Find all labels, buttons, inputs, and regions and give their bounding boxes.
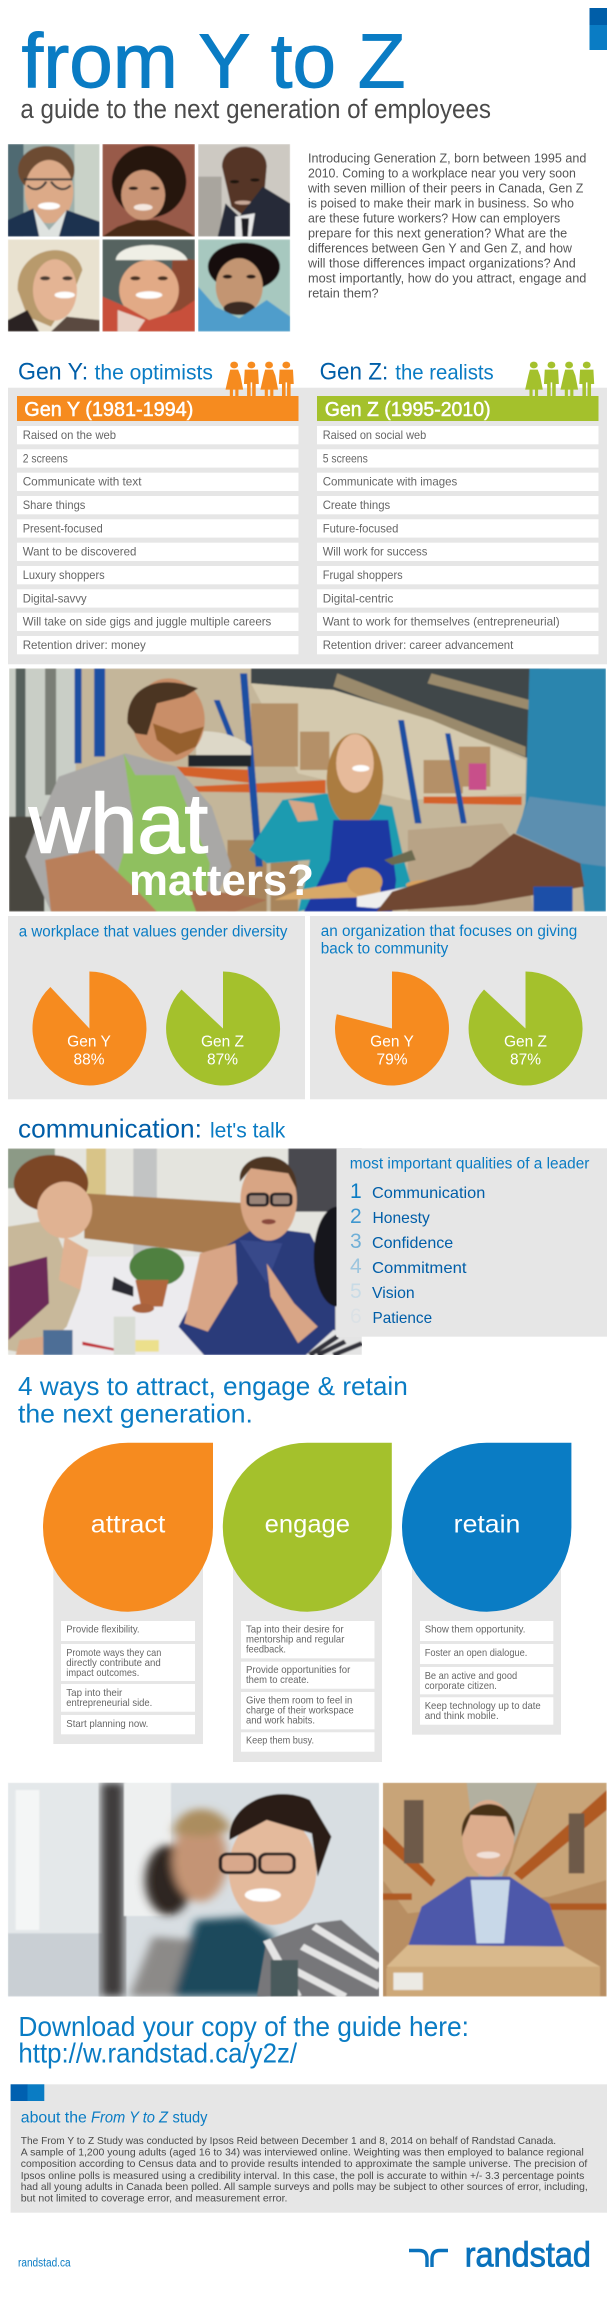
heading: Gen Z the realists: the realists: [395, 361, 494, 384]
icon: logo mark: [409, 2250, 448, 2267]
portrait 4: [8, 239, 100, 332]
item 5: 5: [350, 1280, 362, 1303]
pie: Gen Z 87%: Gen Z: [201, 1034, 244, 1051]
panel: qualities of a leader: [336, 1148, 607, 1337]
icon: blue squares: [11, 2084, 44, 2101]
heading: Gen Y the optimists: Gen Y:: [18, 358, 88, 385]
pie: Gen Y 88%: 88%: [73, 1052, 105, 1069]
item 5: Vision: [372, 1285, 415, 1302]
portrait 6: [198, 239, 290, 332]
Gen Z header bar: Gen Z (1995-2010): [325, 399, 491, 421]
study methodology text: [21, 2136, 588, 2205]
woman right: [313, 1206, 336, 1308]
column: attract: [43, 1443, 213, 1744]
column: engage: mentorship and regular: [246, 1634, 345, 1646]
drop: engage: engage: [265, 1511, 350, 1539]
study methodology text: but not limited to coverage error, and measurement error.: [21, 2194, 288, 2205]
item 6: Patience: [372, 1310, 432, 1327]
study methodology text: composition according to Census data and to provide results intended to approximate the sample universe. The precision of: [21, 2159, 587, 2170]
column: retain: [402, 1443, 571, 1735]
heading: Gen Z the realists: Gen Z:: [320, 358, 388, 385]
study methodology text: A sample of 1,200 young adults (aged 16 to 34) was interviewed online. Weighting was then employed to balance regional: [21, 2148, 584, 2159]
item 3: 3: [350, 1230, 362, 1253]
column: retain: Be an active and good: [425, 1670, 517, 1682]
portrait 3: [198, 144, 290, 237]
drop: attract: [43, 1443, 213, 1612]
drop: attract: attract: [91, 1511, 165, 1539]
woman left: [8, 1220, 80, 1355]
column: engage: Tap into their desire for: [246, 1624, 344, 1636]
Gen Y column: Luxury shoppers: [23, 568, 105, 582]
title: from Y to Z: [22, 19, 406, 105]
intro text: with seven million of their peers in Canada, Gen Z: [307, 180, 583, 195]
Gen Y column: Retention driver: money: [23, 638, 146, 652]
intro text: will those differences impact organizations? And: [307, 255, 576, 270]
heading: 4 ways: 4 ways to attract, engage & retain: [18, 1371, 408, 1401]
item 4: 4: [350, 1255, 362, 1278]
pie: Gen Z 87%: 87%: [510, 1052, 541, 1069]
column: engage: charge of their workspace: [246, 1705, 354, 1717]
Gen Y column: Digital-savvy: [23, 591, 87, 605]
column: retain: and think mobile.: [425, 1710, 499, 1722]
pie: Gen Z 87%: 87%: [207, 1052, 238, 1069]
panel title: back to community: [321, 940, 449, 957]
Gen Z header bar: [317, 396, 598, 421]
column: attract: Promote ways they can: [66, 1647, 161, 1659]
pie: Gen Y 79%: [335, 972, 449, 1086]
column: retain: corporate citizen.: [425, 1680, 497, 1692]
intro text: are these future workers? How can employers: [308, 210, 561, 225]
pie: Gen Y 79%: 79%: [376, 1052, 408, 1069]
download call to action: http://w.randstad.ca/y2z/: [18, 2038, 297, 2069]
study methodology text: had all young adults in Canada been polled. All sample surveys and polls may be subject to other sources of error, including,: [21, 2182, 588, 2193]
column: attract: Start planning now.: [66, 1718, 148, 1730]
item 4: Commitment: [372, 1260, 467, 1277]
heading: 4 ways: the next generation.: [18, 1399, 253, 1429]
Gen Y header bar: Gen Y (1981-1994): [24, 399, 193, 421]
heading: communication: let's talk: [210, 1119, 286, 1142]
item 6: 6: [350, 1305, 362, 1328]
website link: randstad.ca: [18, 2258, 71, 2270]
download call to action: [18, 2011, 469, 2069]
icon: green people: [525, 362, 594, 396]
Gen Z column: Raised on social web: [323, 428, 426, 442]
heading: Gen Y the optimists: the optimists: [94, 361, 213, 384]
Gen Y column: Will take on side gigs and juggle multiple careers: [23, 615, 271, 629]
panel: about the study: [11, 2084, 607, 2213]
column: engage: [223, 1443, 392, 1762]
pie: Gen Y 79%: Gen Y: [370, 1034, 414, 1051]
panel: giving back to community: [310, 916, 607, 1099]
intro text: [307, 150, 586, 300]
panel title: [321, 923, 577, 957]
intro text: 2010. Coming to a workplace near you very soon: [308, 165, 576, 180]
portrait 5: [102, 239, 195, 332]
heading: Gen Y the optimists: [18, 358, 213, 385]
column: engage: them to create.: [246, 1674, 309, 1686]
Gen Y column: Raised on the web: [23, 428, 116, 442]
drop: retain: [402, 1443, 571, 1612]
column: engage: Provide opportunities for: [246, 1664, 351, 1676]
man center: [178, 1227, 335, 1355]
portrait 1: [8, 144, 100, 237]
pie: Gen Y 88%: Gen Y: [67, 1034, 111, 1051]
Gen Z column: Will work for success: [323, 545, 427, 559]
about heading: [21, 2109, 207, 2126]
study methodology text: Ipsos online polls is measured using a credibility interval. In this case, the poll is accurate to within +/- 3.3 percentage points: [21, 2171, 584, 2182]
column: attract: directly contribute and: [66, 1657, 161, 1669]
item 3: Confidence: [372, 1235, 453, 1252]
intro text: prepare for this next generation? What are the: [308, 225, 567, 240]
Gen Y column: Share things: [23, 498, 85, 512]
heading: communication: [18, 1113, 286, 1143]
subtitle: a guide to the next generation of employees: [20, 94, 491, 124]
matters heading: matters?: [129, 856, 314, 905]
about heading: about the: [21, 2109, 87, 2126]
intro text: most importantly, how do you attract, engage and: [308, 270, 586, 285]
photo: smiling young woman with glasses: [8, 1783, 379, 1997]
Gen Y column: Communicate with text: [23, 475, 142, 489]
Gen Y column: [17, 396, 298, 654]
photo: warehouse worker with box: [383, 1783, 607, 1997]
column: engage: Keep them busy.: [246, 1735, 314, 1747]
Gen Z column: Retention driver: career advancement: [323, 638, 514, 652]
Gen Y column: Want to be discovered: [23, 545, 136, 559]
study methodology text: The From Y to Z Study was conducted by Ipsos Reid between December 1 and 8, 2014 on behalf of Randstad Canada.: [21, 2136, 556, 2147]
item 1: 1: [350, 1180, 362, 1203]
column: attract: impact outcomes.: [66, 1667, 139, 1679]
column: engage: feedback.: [246, 1644, 286, 1656]
panel title: an organization that focuses on giving: [321, 923, 577, 940]
what heading: what: [28, 777, 208, 871]
item 2: [350, 1205, 430, 1228]
pie: Gen Z 87%: [166, 971, 280, 1085]
intro text: is poised to make their mark in business. So who: [308, 195, 574, 210]
randstad logo: [409, 2236, 591, 2275]
drop: engage: [223, 1443, 392, 1612]
Gen Z column: [317, 396, 598, 654]
Gen Y column: Present-focused: [23, 521, 103, 535]
woman with blue apron: [249, 793, 412, 912]
intro text: retain them?: [308, 285, 379, 300]
item 3: [350, 1230, 453, 1253]
item 2: 2: [350, 1205, 362, 1228]
column: attract: entrepreneurial side.: [66, 1697, 152, 1709]
item 5: [350, 1280, 415, 1303]
Gen Y header bar: [17, 396, 298, 421]
intro text: Introducing Generation Z, born between 1995 and: [308, 150, 586, 165]
Gen Z column: Want to work for themselves (entrepreneurial): [323, 615, 560, 629]
Gen Z column: Create things: [323, 498, 390, 512]
pie: Gen Z 87%: Gen Z: [504, 1034, 547, 1051]
icon: corner brand squares: [590, 8, 607, 50]
download call to action: Download your copy of the guide here:: [18, 2011, 469, 2042]
icon: orange people: [226, 362, 294, 396]
Gen Z column: Future-focused: [323, 521, 398, 535]
column: retain: Show them opportunity.: [425, 1624, 526, 1636]
drop: retain: retain: [454, 1511, 520, 1539]
heading: communication: communication:: [18, 1113, 202, 1143]
column: attract: Provide flexibility.: [66, 1624, 140, 1636]
panel title: most important qualities of a leader: [350, 1156, 589, 1173]
pie: Gen Y 88%: [32, 971, 146, 1086]
column: engage: and work habits.: [246, 1715, 315, 1727]
intro text: differences between Gen Y and Gen Z, and how: [308, 240, 572, 255]
column: attract: Tap into their: [66, 1687, 123, 1699]
column: engage: Give them room to feel in: [246, 1695, 352, 1707]
Gen Z column: Communicate with images: [323, 475, 457, 489]
Gen Z column: Frugal shoppers: [323, 568, 403, 582]
person in denim from behind: [518, 668, 606, 912]
item 1: Communication: [372, 1185, 485, 1202]
photo grid: six portraits: [8, 144, 290, 332]
photo: food bank volunteers in warehouse: [9, 668, 606, 912]
item 4: [350, 1255, 467, 1278]
column: retain: Foster an open dialogue.: [425, 1647, 527, 1659]
pie: Gen Z 87%: [469, 972, 583, 1086]
portrait 2: [102, 144, 195, 237]
panel title: a workplace that values gender diversity: [19, 924, 288, 941]
item 6: [350, 1305, 432, 1328]
man with green apron: [25, 753, 231, 912]
Gen Y column: 2 screens: [23, 451, 68, 465]
wordmark: randstad: [465, 2236, 591, 2275]
panel: gender diversity: [8, 916, 305, 1099]
Gen Z column: 5 screens: [323, 451, 368, 465]
photo: office conversation: [8, 1148, 362, 1355]
Gen Z column: Digital-centric: [323, 591, 393, 605]
heading: Gen Z the realists: [320, 358, 494, 385]
panel: Gen Y vs Gen Z comparison: [8, 388, 607, 664]
heading: 4 ways: [18, 1371, 408, 1429]
about heading: From Y to Z: [91, 2109, 169, 2126]
item 2: Honesty: [372, 1210, 430, 1227]
column: retain: Keep technology up to date: [425, 1700, 541, 1712]
about heading: study: [172, 2109, 208, 2126]
item 1: [350, 1180, 485, 1203]
